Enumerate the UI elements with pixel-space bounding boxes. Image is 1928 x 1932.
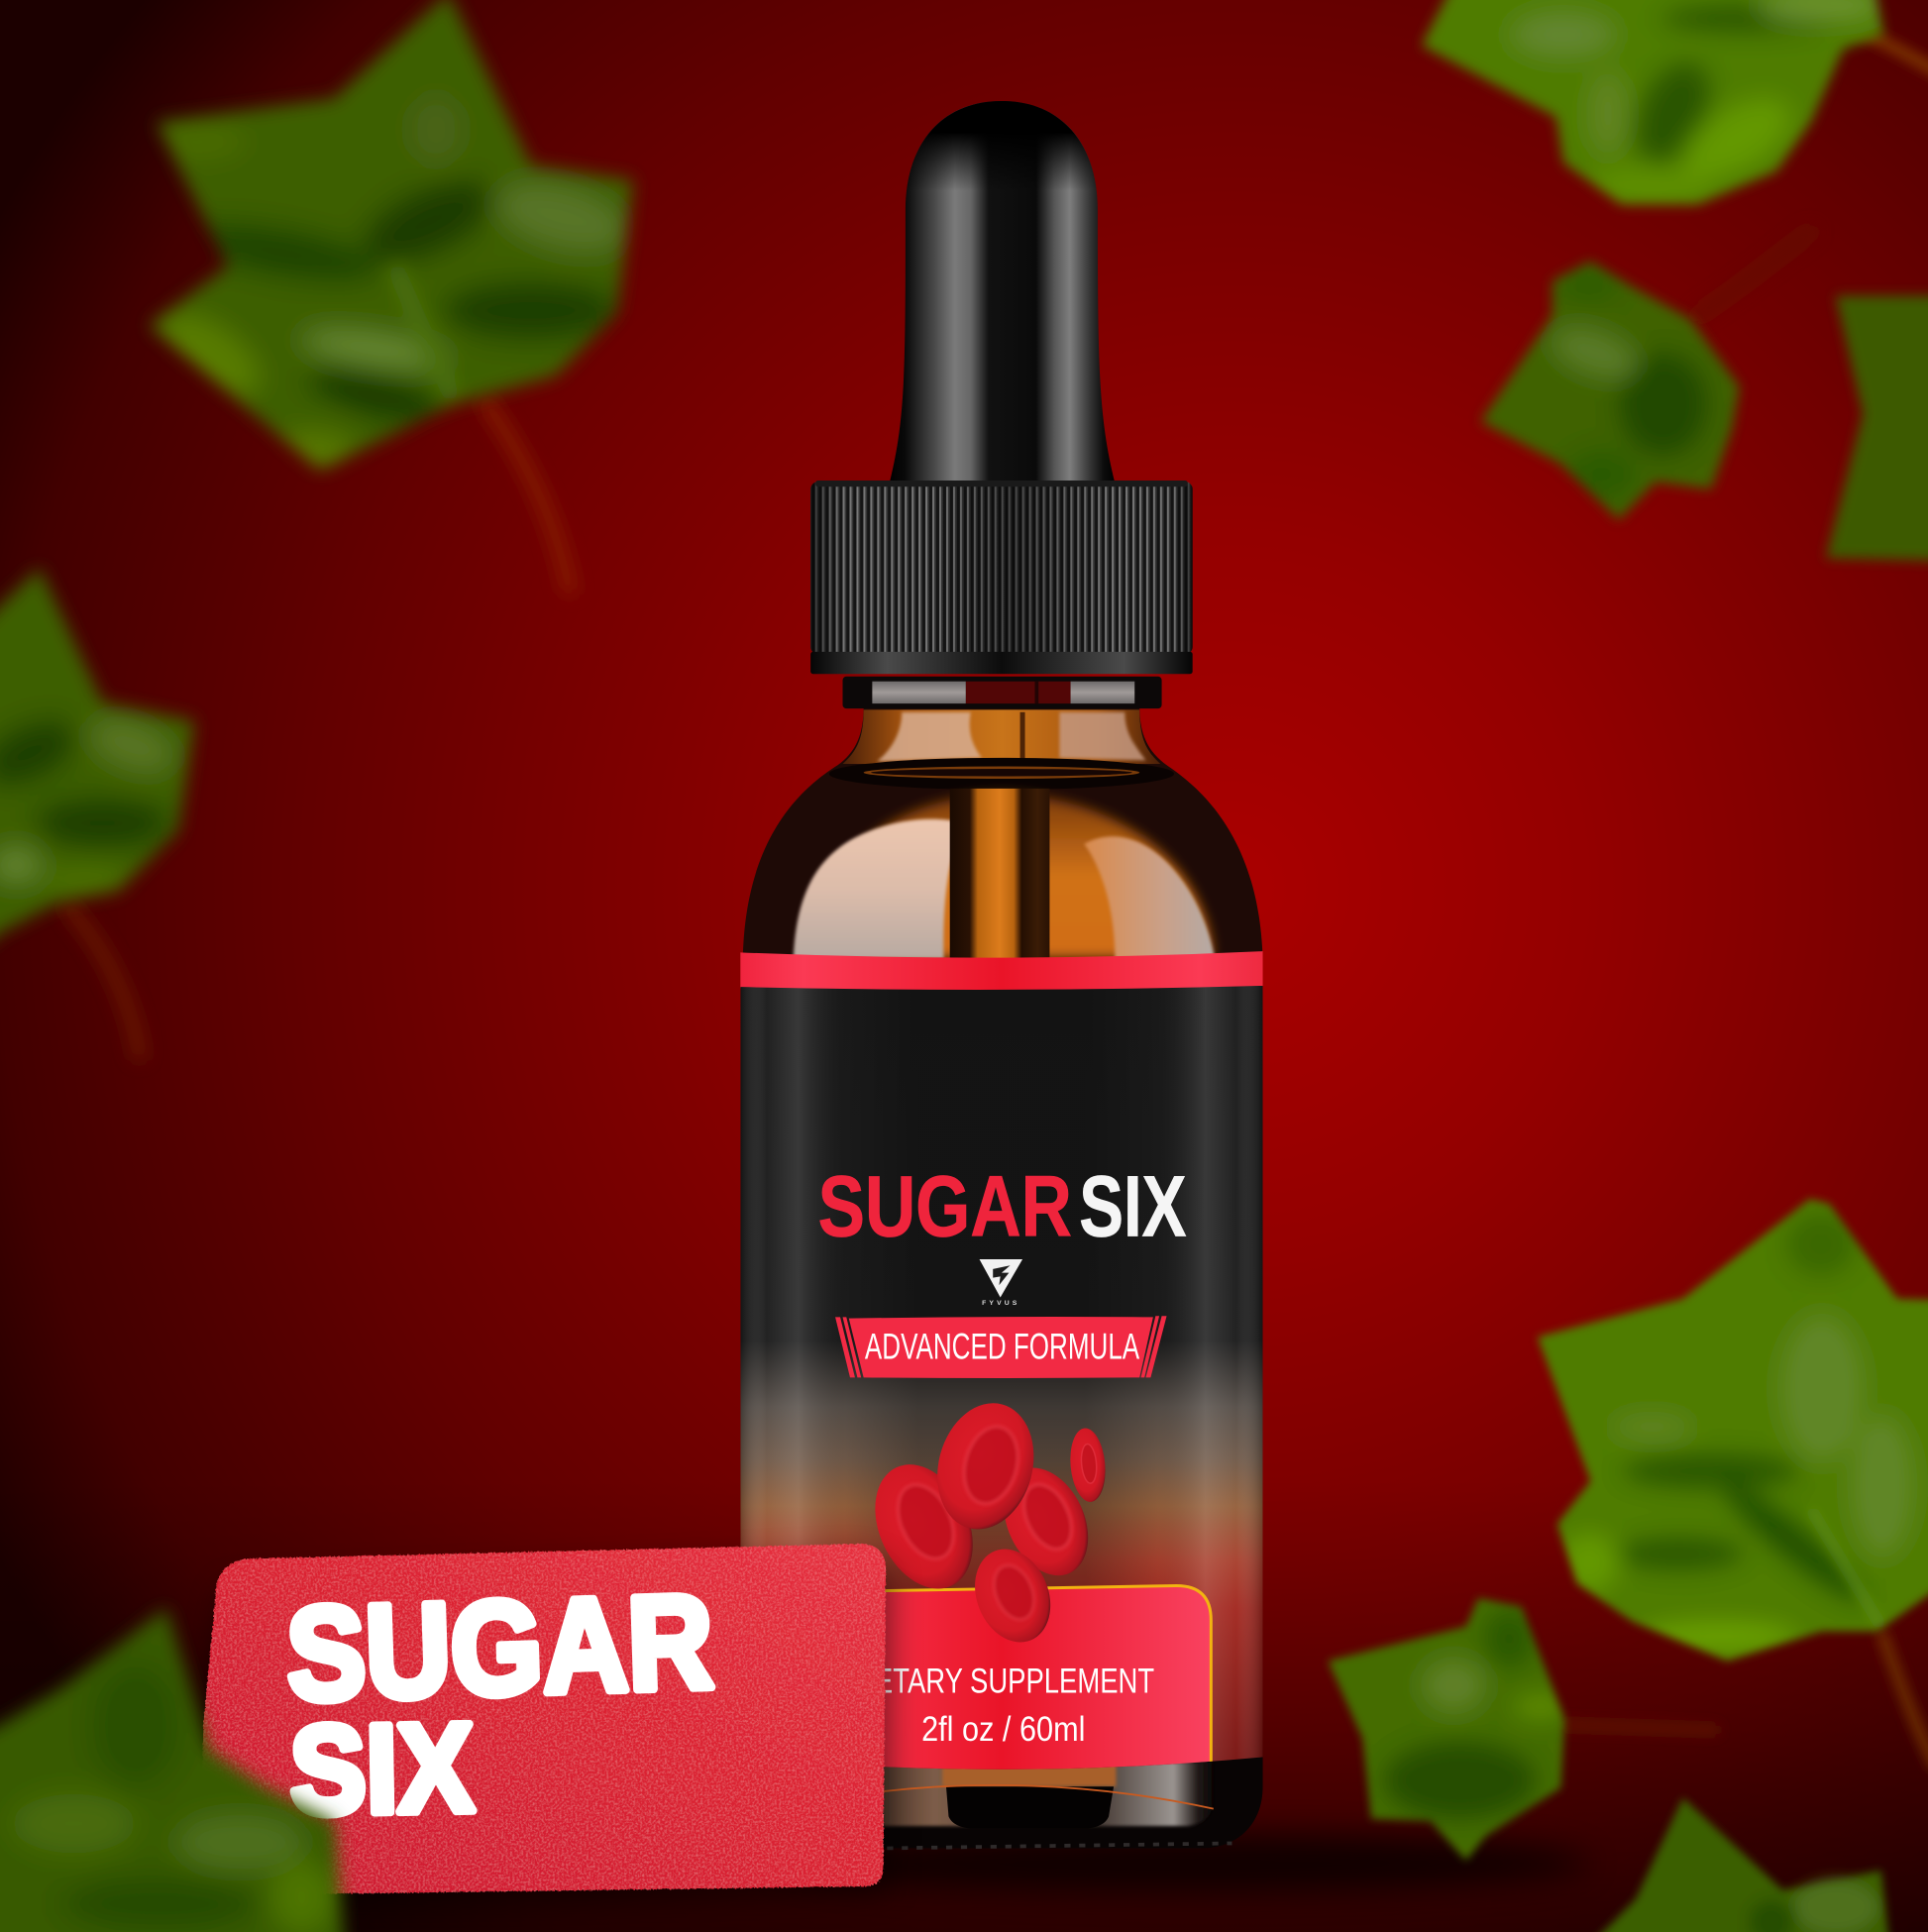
red paper card with title xyxy=(201,1544,886,1897)
leaf: upper right middle xyxy=(1476,256,1746,525)
neck ring xyxy=(843,677,1162,708)
yellow-trimmed red panel xyxy=(884,1584,1213,1770)
leaf: large bottom right xyxy=(1538,1199,1928,1769)
leaf: top right xyxy=(1422,0,1928,204)
leaf: left edge xyxy=(0,568,194,1053)
leaf: bottom left foreground xyxy=(0,1608,348,1932)
glass shoulders xyxy=(743,707,1263,959)
brand name on label: SUGAR xyxy=(818,1158,1072,1254)
title: SUGAR: SUGAR xyxy=(284,1567,715,1729)
logo: FYVUS mark xyxy=(980,1259,1022,1307)
advanced formula banner: ADVANCED FORMULA xyxy=(865,1326,1139,1367)
leaf: large top left xyxy=(144,0,634,588)
volume text: 2fl oz / 60ml xyxy=(921,1710,1085,1749)
ribbed black cap xyxy=(810,481,1193,674)
product: dropper bottle xyxy=(740,101,1263,1848)
leaf: bottom edge right xyxy=(1564,1797,1892,1932)
label xyxy=(740,951,1263,1780)
card shadow xyxy=(185,1558,890,1910)
leaf: right edge xyxy=(1826,295,1928,562)
red blood cells illustration xyxy=(856,1392,1109,1654)
bottle floor shadow xyxy=(776,1834,1589,1892)
title: SIX: SIX xyxy=(288,1696,475,1841)
card surface xyxy=(201,1544,886,1897)
dark glass base xyxy=(740,1750,1263,1848)
brand name on label: SIX xyxy=(1079,1158,1186,1254)
red top band xyxy=(740,951,1263,991)
dietary supplement text: DIETARY SUPPLEMENT xyxy=(847,1663,1154,1701)
advanced formula banner xyxy=(835,1316,1167,1378)
leaf: bottom right small xyxy=(1328,1598,1715,1861)
label body xyxy=(740,986,1263,1780)
dropper rubber bulb xyxy=(890,101,1115,483)
logo: FYVUS mark: FYVUS xyxy=(982,1300,1019,1307)
